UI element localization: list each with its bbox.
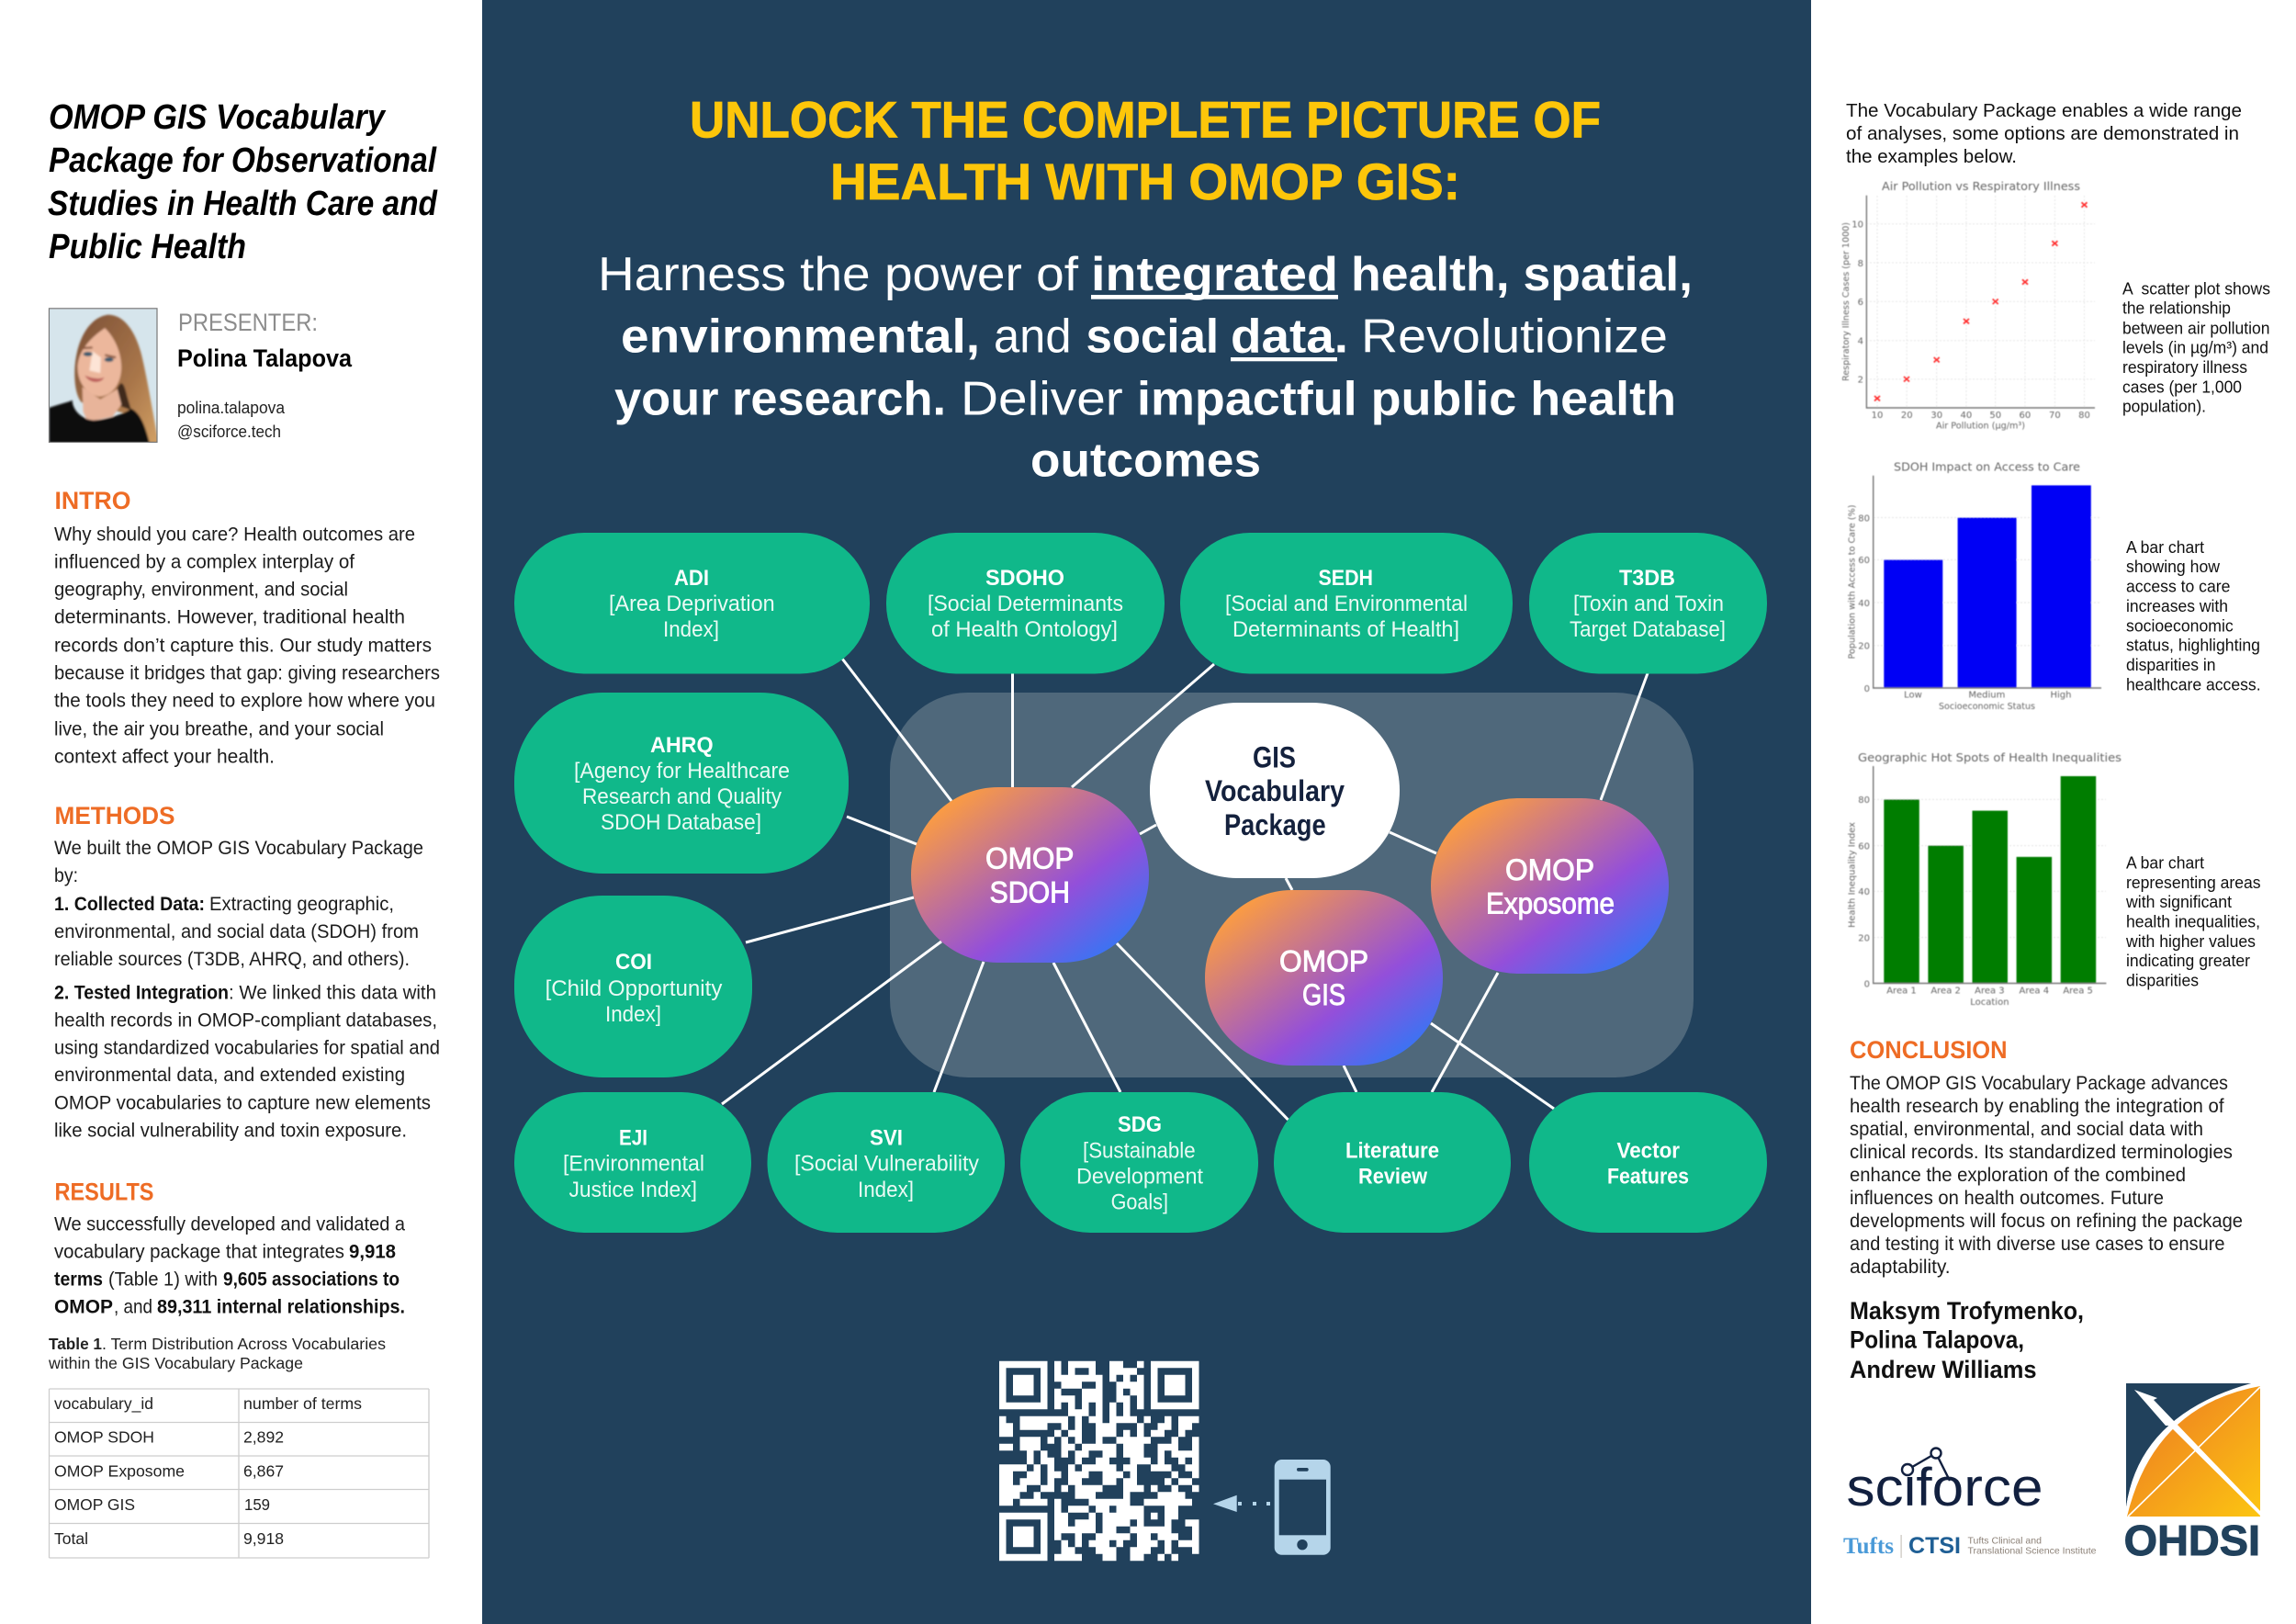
node: GIS Vocabulary Package: Vocabulary xyxy=(1205,774,1345,807)
node: EJI xyxy=(514,1092,751,1233)
logo: Tufts CTSI: Translational Science Institute xyxy=(1967,1546,2097,1557)
text block: methods xyxy=(54,837,440,1141)
table: term distribution: OMOP GIS xyxy=(54,1495,135,1514)
text block: methods: : We linked this data with xyxy=(229,981,436,1003)
node: AHRQ: Research and Quality xyxy=(582,784,782,809)
text block: methods: using standardized vocabularies for spatial and xyxy=(54,1036,440,1058)
node: OMOP SDOH xyxy=(911,787,1149,963)
text block: scatter plot description: population). xyxy=(2122,398,2206,416)
chart: geographic hot spots of health inequalities: Area 1 xyxy=(1886,987,1917,996)
panel: right column xyxy=(1841,100,2270,1564)
text block: results: OMOP xyxy=(54,1295,113,1317)
text block: access to care description: status, highlighting xyxy=(2126,637,2260,655)
heading: main headline: UNLOCK THE COMPLETE PICTURE OF xyxy=(690,90,1601,149)
table: term distribution xyxy=(50,1389,429,1558)
text block: hot spots description: with significant xyxy=(2125,893,2232,911)
node: GIS Vocabulary Package: GIS xyxy=(1253,740,1296,773)
chart: geographic hot spots of health inequalities: Area 4 xyxy=(2020,987,2049,996)
arrow: dotted arrow from phone to QR xyxy=(1213,1495,1270,1512)
text block: subheading: environmental, xyxy=(621,310,980,364)
text block: results: terms xyxy=(54,1268,103,1290)
chart: SDOH impact on access to care: 80 xyxy=(1858,513,1870,524)
text block: intro: influenced by a complex interplay of xyxy=(54,551,355,573)
node: EJI: EJI xyxy=(619,1126,647,1150)
text block: results: (Table 1) with xyxy=(108,1268,218,1290)
text block: access to care description: socioeconomic xyxy=(2126,616,2234,635)
logo: OHDSI: OHDSI xyxy=(2124,1517,2260,1564)
node: COI: Index] xyxy=(605,1002,661,1027)
chart: SDOH impact on access to care: 60 xyxy=(1858,556,1870,566)
text block: conclusion: The OMOP GIS Vocabulary Package advances xyxy=(1850,1072,2228,1094)
text block: scatter plot description: between air pollution xyxy=(2122,319,2270,337)
node: SDOHO: of Health Ontology] xyxy=(931,617,1118,642)
panel: center column content xyxy=(514,90,1767,1561)
text block: methods: by: xyxy=(54,864,78,886)
text block: subheading: your research. xyxy=(614,373,946,426)
text block: intro: records don’t capture this. Our study matters xyxy=(54,634,432,656)
title: Studies in Health Care and xyxy=(48,185,438,223)
node: GIS Vocabulary Package: Package xyxy=(1224,808,1326,841)
node: SDG xyxy=(1020,1092,1258,1233)
chart: geographic hot spots of health inequalities: Area 3 xyxy=(1975,987,2005,996)
chart: scatter plot air pollution vs respiratory illness: 60 xyxy=(2020,411,2031,421)
node: AHRQ xyxy=(514,693,849,874)
chart: scatter plot air pollution vs respiratory illness: 20 xyxy=(1901,411,1913,421)
panel: left column xyxy=(48,98,440,1558)
chart: geographic hot spots of health inequalities: 0 xyxy=(1864,979,1870,989)
presenter label: PRESENTER: xyxy=(178,309,318,336)
node: SVI: [Social Vulnerability xyxy=(794,1152,979,1176)
text block: intro: determinants. However, traditional health xyxy=(54,606,405,628)
text block: methods: health records in OMOP-compliant databases, xyxy=(54,1009,437,1031)
text block: results: 9,605 associations to xyxy=(223,1268,400,1290)
text block: access to care description: A bar chart xyxy=(2126,538,2204,557)
table: term distribution: 9,918 xyxy=(243,1529,284,1548)
node: OMOP GIS xyxy=(1205,890,1443,1066)
text block: scatter plot description: levels (in µg/m³) and xyxy=(2122,339,2268,357)
heading: results: RESULTS xyxy=(55,1178,154,1205)
node: SEDH: [Social and Environmental xyxy=(1225,592,1468,616)
title: Package for Observational xyxy=(49,141,437,180)
node: SVI: SVI xyxy=(870,1126,903,1150)
table: term distribution: 2,892 xyxy=(243,1427,284,1446)
text block: authors: Maksym Trofymenko, xyxy=(1850,1297,2084,1325)
text block: results: 89,311 internal relationships. xyxy=(157,1295,405,1317)
chart: geographic hot spots of health inequalities: 40 xyxy=(1858,887,1870,897)
panel: OMOP vocabularies backdrop xyxy=(890,693,1694,1077)
chart: SDOH impact on access to care: Low xyxy=(1904,691,1922,701)
text block: authors: Polina Talapova, xyxy=(1850,1326,2024,1354)
title: OMOP GIS Vocabulary xyxy=(49,98,387,137)
chart: SDOH impact on access to care: 20 xyxy=(1858,641,1870,652)
chart: scatter plot air pollution vs respiratory illness: 50 xyxy=(1989,411,2001,421)
text block: methods: 2. Tested Integration xyxy=(54,981,229,1003)
table caption xyxy=(48,1335,386,1372)
chart: scatter plot air pollution vs respiratory illness: 2 xyxy=(1858,375,1863,386)
node: COI: COI xyxy=(615,950,652,975)
text block: subheading: integrated xyxy=(1091,248,1338,301)
node: Vector Features: Features xyxy=(1607,1165,1689,1189)
text block: methods: environmental data, and extended existing xyxy=(54,1064,405,1086)
table: term distribution: 159 xyxy=(244,1495,270,1514)
text block: authors xyxy=(1850,1297,2084,1383)
node: OMOP GIS: OMOP xyxy=(1279,944,1368,977)
node: AHRQ: SDOH Database] xyxy=(601,810,761,835)
node: Literature Review xyxy=(1274,1092,1511,1233)
text block: scatter plot description xyxy=(2122,280,2270,416)
node: SDOHO xyxy=(886,533,1165,674)
text block: conclusion xyxy=(1850,1072,2243,1278)
text block: conclusion: spatial, environmental, and social data with xyxy=(1850,1118,2203,1140)
text block: scatter plot description: cases (per 1,000 xyxy=(2122,378,2242,396)
heading: conclusion: CONCLUSION xyxy=(1850,1036,2008,1064)
node: ADI xyxy=(514,533,870,674)
text block: intro xyxy=(54,524,440,768)
text block: hot spots description: disparities xyxy=(2126,972,2199,990)
text block: methods: environmental, and social data (SDOH) from xyxy=(54,920,419,942)
text block: subheading: Revolutionize xyxy=(1361,310,1668,364)
chart: geographic hot spots of health inequalities: Location xyxy=(1970,998,2009,1008)
heading: methods: METHODS xyxy=(55,802,174,829)
text block: scatter plot description: respiratory illness xyxy=(2122,358,2247,377)
text block: subheading: impactful public health xyxy=(1137,373,1676,426)
chart: geographic hot spots of health inequalities: Area 2 xyxy=(1930,987,1961,996)
chart: geographic hot spots of health inequalities: 20 xyxy=(1858,933,1870,943)
logo: OHDSI xyxy=(2124,1383,2260,1564)
presenter contact xyxy=(177,399,286,441)
chart: geographic hot spots of health inequalities: Health Inequality Index xyxy=(1848,822,1857,928)
text block: subheading xyxy=(598,248,1693,487)
node: SVI xyxy=(768,1092,1005,1233)
node: SDOHO: [Social Determinants xyxy=(928,592,1123,616)
node: COI xyxy=(514,896,752,1077)
node: OMOP SDOH: SDOH xyxy=(990,875,1070,908)
node: ADI: Index] xyxy=(663,617,719,642)
text block: subheading: outcomes xyxy=(1030,434,1261,487)
text block: access to care description: showing how xyxy=(2126,558,2221,576)
text block: subheading: health, spatial, xyxy=(1351,248,1693,301)
text block: intro: live, the air you breathe, and your social xyxy=(54,718,384,740)
text block: subheading: Harness the power of xyxy=(598,248,1079,301)
node: OMOP Exposome: OMOP xyxy=(1505,853,1594,886)
chart: SDOH impact on access to care xyxy=(1848,459,2101,712)
table: term distribution: number of terms xyxy=(243,1394,362,1413)
node: SDG: [Sustainable xyxy=(1083,1139,1196,1163)
text block: results: 9,918 xyxy=(349,1240,396,1262)
chart: SDOH impact on access to care: High xyxy=(2051,691,2071,701)
node: SDG: SDG xyxy=(1118,1112,1162,1137)
presenter name: Polina Talapova xyxy=(177,344,353,372)
text block: intro to analyses: of analyses, some options are demonstrated in xyxy=(1846,123,2239,144)
chart: scatter plot air pollution vs respiratory illness: Respiratory Illness Cases (per 1000) xyxy=(1841,222,1851,381)
node: OMOP GIS: GIS xyxy=(1302,978,1345,1011)
logo: Tufts CTSI: CTSI xyxy=(1908,1533,1961,1559)
text block: methods: We built the OMOP GIS Vocabulary Package xyxy=(54,837,423,859)
table: term distribution: OMOP SDOH xyxy=(54,1427,154,1446)
node: Vector Features: Vector xyxy=(1616,1139,1680,1163)
chart: scatter plot air pollution vs respiratory illness: 30 xyxy=(1930,411,1942,421)
chart: scatter plot air pollution vs respiratory illness: 4 xyxy=(1858,336,1863,347)
chart: geographic hot spots of health inequalities xyxy=(1848,750,2122,1008)
chart: scatter plot air pollution vs respiratory illness: 80 xyxy=(2078,411,2090,421)
text block: subheading: data. xyxy=(1231,310,1348,364)
text block: access to care description: healthcare access. xyxy=(2126,675,2261,694)
logo: Tufts CTSI xyxy=(1843,1533,2097,1559)
node: EJI: [Environmental xyxy=(563,1152,704,1176)
text block: methods: 1. Collected Data: xyxy=(54,893,205,915)
chart: SDOH impact on access to care: SDOH Impact on Access to Care xyxy=(1894,459,2080,474)
node: SEDH xyxy=(1180,533,1513,674)
text block: intro to analyses: the examples below. xyxy=(1846,146,2017,167)
text block: methods: OMOP vocabularies to capture new elements xyxy=(54,1091,431,1113)
chart: scatter plot air pollution vs respiratory illness: 40 xyxy=(1961,411,1972,421)
text block: conclusion: influences on health outcomes. Future xyxy=(1850,1187,2164,1209)
text block: access to care description: access to care xyxy=(2126,578,2230,596)
node: SVI: Index] xyxy=(858,1178,914,1202)
node: Literature Review: Literature xyxy=(1345,1139,1439,1163)
node: T3DB: T3DB xyxy=(1619,566,1675,591)
text block: intro: geography, environment, and social xyxy=(54,579,348,601)
node: SEDH: SEDH xyxy=(1319,566,1373,591)
text block: intro: context affect your health. xyxy=(54,746,275,768)
logo: Tufts CTSI: Tufts xyxy=(1843,1534,1894,1559)
logo: sciforce: sciforce xyxy=(1846,1458,2043,1517)
node: ADI: [Area Deprivation xyxy=(609,592,775,616)
table: term distribution: 6,867 xyxy=(243,1462,284,1481)
node: T3DB: Target Database] xyxy=(1570,617,1726,642)
presenter contact: polina.talapova xyxy=(177,399,286,417)
node: SDOHO: SDOHO xyxy=(985,566,1064,591)
node: AHRQ: [Agency for Healthcare xyxy=(574,759,790,784)
text block: hot spots description: A bar chart xyxy=(2126,854,2204,873)
node: OMOP SDOH: OMOP xyxy=(985,842,1075,875)
table caption: . Term Distribution Across Vocabularies xyxy=(102,1335,386,1353)
node: SDG: Development xyxy=(1076,1165,1203,1189)
text block: results: , and xyxy=(114,1295,152,1317)
text block: conclusion: adaptability. xyxy=(1850,1256,1951,1278)
chart: geographic hot spots of health inequalities: Geographic Hot Spots of Health Inequalities xyxy=(1858,750,2122,764)
node: ADI: ADI xyxy=(674,566,709,591)
table: term distribution: vocabulary_id xyxy=(54,1394,153,1414)
chart: SDOH impact on access to care: Socioeconomic Status xyxy=(1939,702,2035,712)
node: Literature Review: Review xyxy=(1358,1165,1427,1189)
table caption: Table 1 xyxy=(49,1335,102,1353)
table: term distribution: OMOP Exposome xyxy=(54,1462,185,1481)
icon: presenter photo xyxy=(49,309,159,445)
text block: access to care description: increases with xyxy=(2126,597,2228,615)
text block: subheading: Deliver xyxy=(961,373,1123,426)
text block: intro: Why should you care? Health outcomes are xyxy=(54,524,415,546)
node: GIS Vocabulary Package xyxy=(1150,703,1400,878)
node: T3DB xyxy=(1529,533,1767,674)
text block: access to care description xyxy=(2126,538,2261,694)
text block: hot spots description: representing areas xyxy=(2126,874,2261,892)
text block: subheading: and xyxy=(994,310,1071,364)
chart: scatter plot air pollution vs respiratory illness: 8 xyxy=(1858,259,1863,269)
text block: subheading: social xyxy=(1086,310,1219,364)
text block: scatter plot description: A scatter plot shows xyxy=(2122,280,2270,299)
chart: scatter plot air pollution vs respiratory illness: 10 xyxy=(1872,411,1883,421)
title xyxy=(48,98,438,266)
node: AHRQ: AHRQ xyxy=(650,733,714,758)
icon: smartphone xyxy=(1275,1460,1331,1555)
node: SEDH: Determinants of Health] xyxy=(1232,617,1459,642)
node: Vector Features xyxy=(1529,1092,1767,1233)
chart: scatter plot air pollution vs respiratory illness xyxy=(1841,179,2095,432)
text block: conclusion: clinical records. Its standardized terminologies xyxy=(1850,1141,2233,1163)
chart: scatter plot air pollution vs respiratory illness: 6 xyxy=(1858,298,1863,308)
QR code xyxy=(999,1361,1199,1561)
chart: SDOH impact on access to care: 40 xyxy=(1858,599,1870,609)
text block: hot spots description: health inequalities, xyxy=(2126,913,2260,931)
chart: scatter plot air pollution vs respiratory illness: 70 xyxy=(2049,411,2061,421)
text block: authors: Andrew Williams xyxy=(1850,1356,2037,1383)
title: Public Health xyxy=(49,228,246,266)
chart: geographic hot spots of health inequalities: Area 5 xyxy=(2063,987,2093,996)
text block: results: We successfully developed and validated a xyxy=(54,1212,405,1235)
node: EJI: Justice Index] xyxy=(569,1178,697,1202)
chart: geographic hot spots of health inequalities: 80 xyxy=(1858,795,1870,806)
heading: intro: INTRO xyxy=(55,487,130,514)
text block: access to care description: disparities in xyxy=(2126,656,2215,674)
chart: scatter plot air pollution vs respiratory illness: Air Pollution (µg/m³) xyxy=(1936,422,2025,432)
table: term distribution: Total xyxy=(54,1529,88,1548)
text block: results xyxy=(54,1212,405,1317)
node: SDG: Goals] xyxy=(1111,1190,1168,1214)
text block: intro to analyses: The Vocabulary Package enables a wide range xyxy=(1846,100,2242,121)
connector lines xyxy=(722,659,1648,1120)
text block: conclusion: developments will focus on refining the package xyxy=(1850,1210,2243,1232)
text block: hot spots description xyxy=(2125,854,2261,990)
heading: main headline: HEALTH WITH OMOP GIS: xyxy=(830,152,1460,210)
text block: conclusion: health research by enabling the integration of xyxy=(1850,1095,2224,1117)
chart: scatter plot air pollution vs respiratory illness: 10 xyxy=(1851,220,1863,230)
text block: methods: reliable sources (T3DB, AHRQ, and others). xyxy=(54,948,410,970)
text block: intro: the tools they need to explore how where you xyxy=(54,689,435,711)
heading: main headline xyxy=(690,90,1601,210)
chart: geographic hot spots of health inequalities: 60 xyxy=(1858,841,1870,851)
chart: scatter plot air pollution vs respiratory illness: Air Pollution vs Respiratory Illness xyxy=(1882,179,2080,193)
text block: results: vocabulary package that integrates xyxy=(54,1240,344,1262)
text block: hot spots description: with higher values xyxy=(2125,932,2256,951)
text block: intro: because it bridges that gap: giving researchers xyxy=(54,661,440,683)
node: OMOP Exposome xyxy=(1431,798,1669,974)
node: T3DB: [Toxin and Toxin xyxy=(1573,592,1724,616)
panel: center navy column xyxy=(482,0,1811,1624)
text block: scatter plot description: the relationship xyxy=(2122,299,2231,318)
text block: methods: like social vulnerability and toxin exposure. xyxy=(54,1119,407,1141)
table caption: within the GIS Vocabulary Package xyxy=(48,1354,303,1372)
text block: conclusion: and testing it with diverse use cases to ensure xyxy=(1850,1233,2224,1255)
chart: SDOH impact on access to care: 0 xyxy=(1864,684,1870,694)
presenter contact: @sciforce.tech xyxy=(177,423,281,441)
logo: Tufts CTSI: Tufts Clinical and xyxy=(1967,1536,2042,1547)
text block: methods: Extracting geographic, xyxy=(209,893,394,915)
node: COI: [Child Opportunity xyxy=(546,976,722,1001)
text block: intro to analyses xyxy=(1846,100,2242,167)
chart: SDOH impact on access to care: Population with Access to Care (%) xyxy=(1848,504,1857,660)
chart: SDOH impact on access to care: Medium xyxy=(1968,691,2005,701)
text block: hot spots description: indicating greater xyxy=(2126,952,2250,970)
node: OMOP Exposome: Exposome xyxy=(1486,887,1615,920)
text block: conclusion: enhance the exploration of the combined xyxy=(1850,1164,2186,1186)
